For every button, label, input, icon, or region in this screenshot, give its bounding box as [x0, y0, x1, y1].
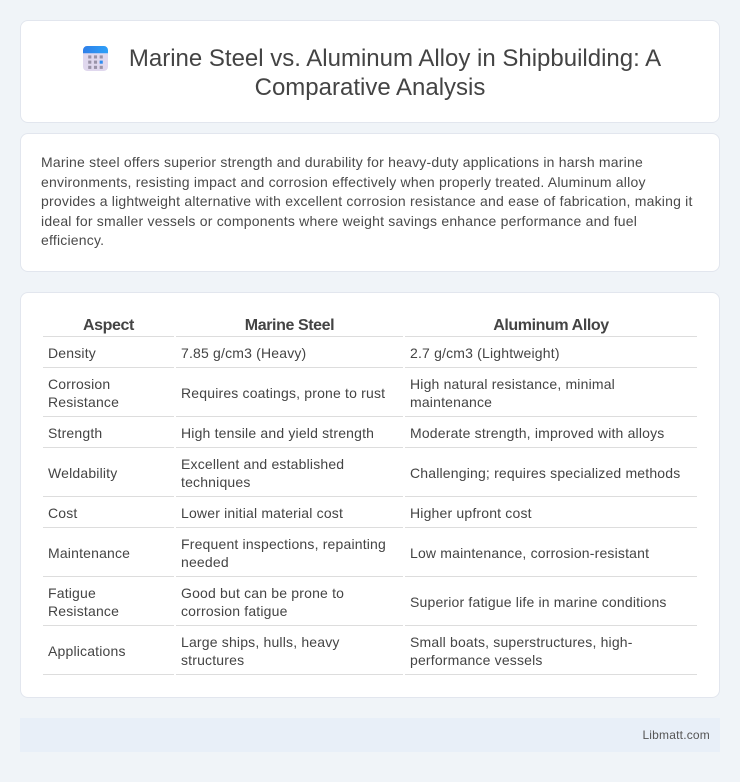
row: applications: structures [181, 652, 244, 668]
row: cost: Cost [48, 505, 78, 521]
row: applications: Large ships, hulls, heavy [181, 634, 340, 650]
table header: Aluminum Alloy [493, 317, 609, 334]
row: fatigue resistance: Resistance [48, 603, 119, 619]
row: strength: High tensile and yield strength [181, 425, 374, 441]
row: fatigue resistance: corrosion fatigue [181, 603, 288, 619]
row: maintenance: Maintenance [48, 545, 130, 561]
row: applications [48, 634, 633, 668]
row: corrosion resistance: High natural resistance, minimal [410, 376, 615, 392]
row: density: Density [48, 345, 96, 361]
row: corrosion resistance: maintenance [410, 394, 492, 410]
row: fatigue resistance: Superior fatigue life in marine conditions [410, 594, 667, 610]
row: maintenance: Low maintenance, corrosion-resistant [410, 545, 649, 561]
row: fatigue resistance [48, 585, 667, 619]
row: weldability: Excellent and established [181, 456, 344, 472]
summary text [41, 154, 693, 248]
row: weldability [48, 456, 680, 490]
row: density: 7.85 g/cm3 (Heavy) [181, 345, 306, 361]
row: weldability: techniques [181, 474, 251, 490]
table header: Marine Steel [245, 317, 334, 334]
summary text: Marine steel offers superior strength and durability for heavy-duty applications in harsh marine [41, 154, 643, 170]
summary text: provides a lightweight alternative with excellent corrosion resistance and ease of fabrication, making it [41, 193, 693, 209]
title [129, 45, 661, 101]
row: fatigue resistance: Good but can be prone to [181, 585, 344, 601]
row: corrosion resistance: Requires coatings, prone to rust [181, 385, 385, 401]
row: strength: Strength [48, 425, 102, 441]
row: strength [48, 425, 664, 441]
row: weldability: Weldability [48, 465, 117, 481]
row: strength: Moderate strength, improved with alloys [410, 425, 664, 441]
footer bar [20, 718, 720, 752]
row: weldability: Challenging; requires specialized methods [410, 465, 680, 481]
row: density: 2.7 g/cm3 (Lightweight) [410, 345, 560, 361]
table card [20, 292, 720, 698]
summary text: environments, resisting impact and corrosion effectively when properly treated. Aluminum alloy [41, 174, 646, 190]
summary card [20, 133, 720, 272]
row: maintenance: needed [181, 554, 229, 570]
title: Comparative Analysis [255, 74, 485, 101]
row: applications: Small boats, superstructures, high- [410, 634, 633, 650]
row: applications: performance vessels [410, 652, 543, 668]
table header [83, 317, 609, 334]
row: cost: Higher upfront cost [410, 505, 532, 521]
row: corrosion resistance [48, 376, 615, 410]
row: fatigue resistance: Fatigue [48, 585, 96, 601]
row: density [48, 345, 560, 361]
row: cost [48, 505, 532, 521]
row: maintenance [48, 536, 649, 570]
icon: calendar [83, 46, 108, 71]
table header: Aspect [83, 317, 134, 334]
title card [20, 20, 720, 123]
row: maintenance: Frequent inspections, repainting [181, 536, 386, 552]
summary text: ideal for smaller vessels or components where weight savings enhance performance and fuel [41, 212, 637, 228]
row: corrosion resistance: Corrosion [48, 376, 110, 392]
summary text: efficiency. [41, 232, 104, 248]
row: cost: Lower initial material cost [181, 505, 343, 521]
footer text: Libmatt.com: Libmatt.com [642, 728, 710, 742]
title: Marine Steel vs. Aluminum Alloy in Shipbuilding: A [129, 45, 661, 72]
row: corrosion resistance: Resistance [48, 394, 119, 410]
row: applications: Applications [48, 643, 126, 659]
comparison table [43, 317, 697, 675]
